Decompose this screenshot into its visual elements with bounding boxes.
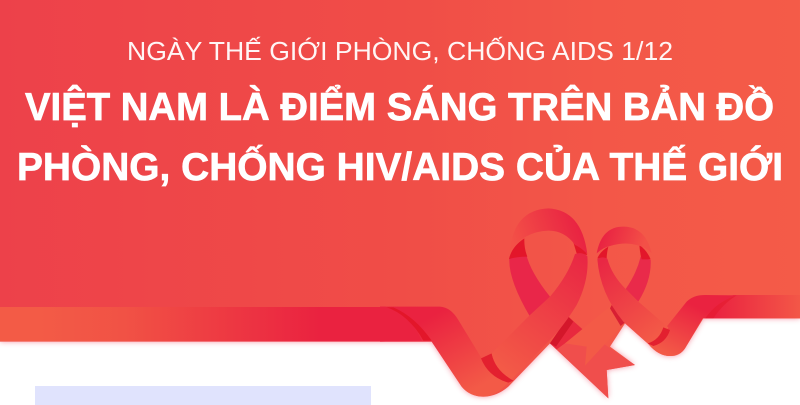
title: PHÒNG, CHỐNG HIV/AIDS CỦA THẾ GIỚI — [17, 144, 783, 189]
AIDS awareness ribbon — [380, 208, 800, 398]
subtitle: NGÀY THẾ GIỚI PHÒNG, CHỐNG AIDS 1/12 — [127, 36, 673, 66]
large loop right fold — [572, 236, 587, 255]
back tail with notch — [550, 318, 635, 398]
title: VIỆT NAM LÀ ĐIỂM SÁNG TRÊN BẢN ĐỒ — [25, 84, 774, 129]
small loop front strand — [597, 257, 668, 344]
front tail with notch — [565, 305, 625, 366]
right tail fold — [648, 327, 670, 346]
large loop front strand — [492, 253, 588, 379]
red ribbon banner strip, left — [0, 307, 440, 342]
small loop right strand — [626, 257, 651, 302]
large loop left strand — [509, 253, 550, 317]
large loop top arc — [510, 208, 587, 254]
right tail — [705, 295, 800, 318]
title — [17, 84, 783, 189]
tail fold, left — [481, 353, 513, 383]
left tail — [380, 307, 510, 397]
shadow seam under front strand — [530, 297, 553, 318]
light blue content panel — [35, 386, 371, 405]
small loop top arc — [597, 227, 652, 253]
